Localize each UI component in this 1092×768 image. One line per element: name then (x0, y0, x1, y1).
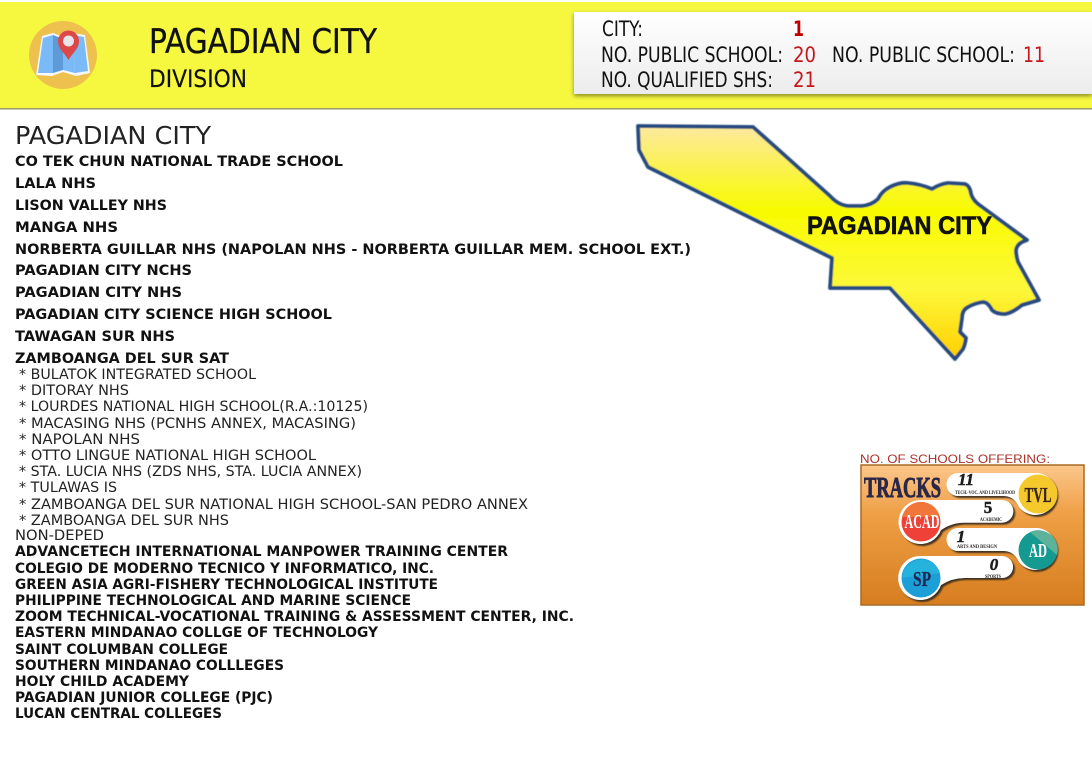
list: other public schools: * STA. LUCIA NHS (ZDS NHS, STA. LUCIA ANNEX) (19, 464, 362, 480)
list: non-DepEd schools: GREEN ASIA AGRI-FISHERY TECHNOLOGICAL INSTITUTE (15, 577, 438, 593)
heading: tracks: TRACKS (864, 472, 941, 504)
header band (0, 2, 1092, 110)
panel: division statistics: NO. QUALIFIED SHS: (601, 68, 773, 92)
panel: division statistics: 1 (793, 17, 804, 41)
list: qualified public schools (15, 154, 691, 367)
track: AD: 1 (957, 527, 965, 546)
list: qualified public schools: PAGADIAN CITY NHS (15, 285, 182, 301)
list: qualified public schools: PAGADIAN CITY SCIENCE HIGH SCHOOL (15, 307, 332, 323)
list: non-DepEd schools: EASTERN MINDANAO COLLGE OF TECHNOLOGY (15, 625, 378, 641)
track: SP (898, 555, 1013, 600)
panel: division statistics: NO. PUBLIC SCHOOL: (832, 43, 1015, 67)
panel: division statistics: 20 (793, 43, 816, 67)
list: other public schools: * BULATOK INTEGRATED SCHOOL (19, 367, 256, 383)
list: other public schools: * LOURDES NATIONAL HIGH SCHOOL(R.A.:10125) (19, 399, 368, 415)
track: TVL: 11 (958, 470, 974, 489)
list: qualified public schools: CO TEK CHUN NATIONAL TRADE SCHOOL (15, 154, 343, 170)
track: ACAD (899, 498, 1013, 544)
list: other public schools: * NAPOLAN NHS (19, 432, 140, 448)
list: qualified public schools: PAGADIAN CITY NCHS (15, 263, 192, 279)
list: qualified public schools: ZAMBOANGA DEL SUR SAT (15, 351, 229, 367)
label: non-DepEd: NON-DEPED (15, 528, 104, 544)
list: other public schools: * ZAMBOANGA DEL SUR NATIONAL HIGH SCHOOL-SAN PEDRO ANNEX (19, 497, 528, 513)
list: qualified public schools: LISON VALLEY NHS (15, 198, 167, 214)
track: TVL: TVL (1024, 483, 1052, 507)
list: other public schools: * TULAWAS IS (19, 480, 117, 496)
panel: division statistics (574, 12, 1092, 94)
track: AD (947, 527, 1058, 570)
panel: division statistics: 11 (1023, 43, 1045, 67)
title: PAGADIAN CITY (149, 22, 377, 62)
subtitle: DIVISION (149, 65, 247, 93)
track: ACAD: ACAD (904, 511, 940, 533)
track: SP: 0 (990, 555, 999, 574)
list: qualified public schools: MANGA NHS (15, 220, 118, 236)
list: non-DepEd schools: PAGADIAN JUNIOR COLLEGE (PJC) (15, 690, 273, 706)
heading: school list: PAGADIAN CITY (15, 121, 212, 150)
list: other public schools: * DITORAY NHS (19, 383, 129, 399)
map: Pagadian City outline (638, 126, 1039, 359)
list: non-DepEd schools: HOLY CHILD ACADEMY (15, 674, 189, 690)
list: non-DepEd schools: ADVANCETECH INTERNATIONAL MANPOWER TRAINING CENTER (15, 544, 508, 560)
list: qualified public schools: NORBERTA GUILLAR NHS (NAPOLAN NHS - NORBERTA GUILLAR MEM. SCHOOL EXT.) (15, 242, 691, 258)
list: non-DepEd schools: SAINT COLUMBAN COLLEGE (15, 642, 228, 658)
list: other public schools (19, 367, 528, 529)
panel: division statistics: 21 (793, 68, 816, 92)
list: non-DepEd schools: LUCAN CENTRAL COLLEGES (15, 706, 222, 722)
list: qualified public schools: TAWAGAN SUR NHS (15, 329, 175, 345)
map: Pagadian City outline: PAGADIAN CITY (807, 212, 992, 240)
track: AD: ARTS AND DESIGN (957, 545, 997, 550)
list: non-DepEd schools: ZOOM TECHNICAL-VOCATIONAL TRAINING & ASSESSMENT CENTER, INC. (15, 609, 574, 625)
list: non-DepEd schools (15, 544, 574, 722)
list: other public schools: * OTTO LINGUE NATIONAL HIGH SCHOOL (19, 448, 316, 464)
list: non-DepEd schools: PHILIPPINE TECHNOLOGICAL AND MARINE SCIENCE (15, 593, 411, 609)
label: number of schools offering: NO. OF SCHOOLS OFFERING: (860, 452, 1050, 466)
panel: tracks (861, 465, 1084, 605)
list: other public schools: * MACASING NHS (PCNHS ANNEX, MACASING) (19, 416, 356, 432)
track: ACAD: ACADEMIC (980, 518, 1002, 523)
panel: division statistics: NO. PUBLIC SCHOOL: (601, 43, 783, 67)
track: TVL (947, 470, 1058, 515)
track: SP: SP (913, 567, 931, 591)
track: SP: SPORTS (985, 575, 1001, 580)
icon: map pin on folded map (29, 21, 97, 89)
list: qualified public schools: LALA NHS (15, 176, 96, 192)
panel: division statistics: CITY: (602, 17, 643, 41)
track: ACAD: 5 (984, 498, 992, 517)
list: non-DepEd schools: SOUTHERN MINDANAO COLLLEGES (15, 658, 284, 674)
track: TVL: TECH.-VOC. AND LIVELIHOOD (955, 491, 1015, 496)
list: non-DepEd schools: COLEGIO DE MODERNO TECNICO Y INFORMATICO, INC. (15, 561, 434, 577)
list: other public schools: * ZAMBOANGA DEL SUR NHS (19, 513, 229, 529)
track: AD: AD (1029, 540, 1047, 562)
